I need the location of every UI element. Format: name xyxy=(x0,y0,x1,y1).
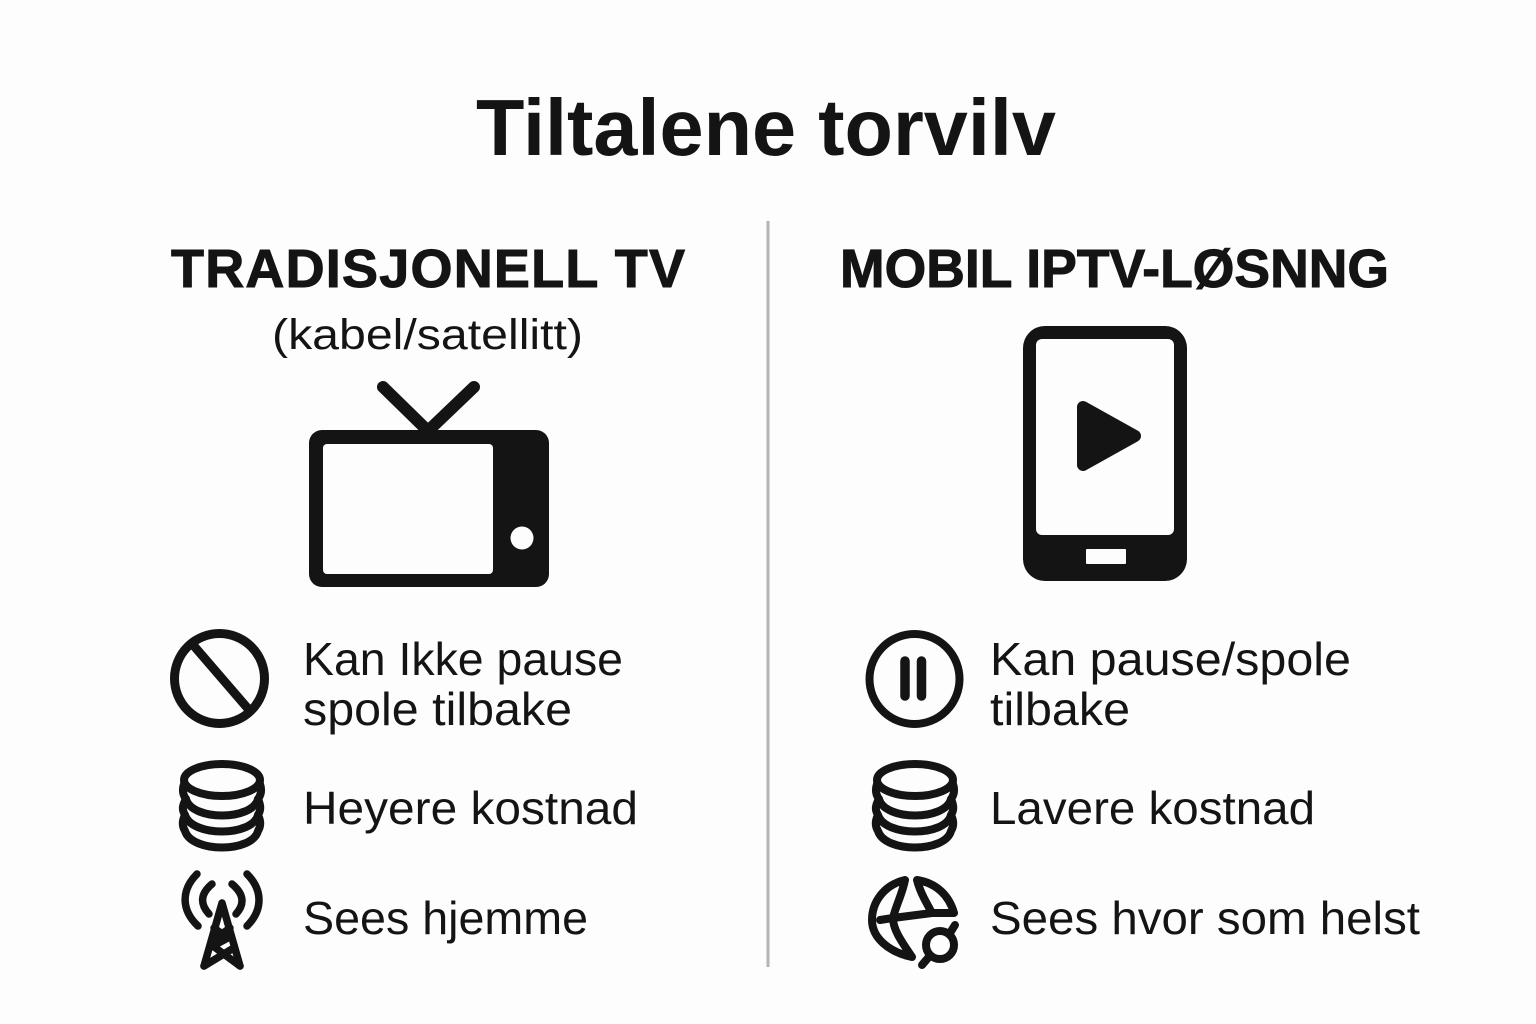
icon: television xyxy=(309,387,549,587)
icon: globe with magnifier xyxy=(872,880,955,965)
text: rewind: spole tilbake xyxy=(303,683,572,735)
panel: mobile IPTV xyxy=(840,239,1420,965)
icon: coins xyxy=(183,764,261,848)
text: watch anywhere: Sees hvor som helst xyxy=(990,892,1420,944)
icon: smartphone xyxy=(1023,326,1187,581)
text: can pause: Kan pause/spole xyxy=(990,633,1351,685)
center divider xyxy=(766,221,770,967)
subheading: cable/satellite: (kabel/satellitt) xyxy=(272,311,583,359)
icon: antenna xyxy=(185,874,259,966)
panel: traditional TV xyxy=(171,239,685,966)
title: Tiltalene torvilv xyxy=(476,83,1057,172)
text: watch at home: Sees hjemme xyxy=(303,892,588,944)
text: higher cost: Heyere kostnad xyxy=(303,782,638,834)
text: cannot pause: Kan Ikke pause xyxy=(303,633,623,685)
icon: coins xyxy=(876,764,954,848)
icon: prohibited xyxy=(174,634,264,724)
text: lower cost: Lavere kostnad xyxy=(990,782,1315,834)
text: rewind: tilbake xyxy=(990,683,1130,735)
heading: traditional TV: TRADISJONELL TV xyxy=(171,239,685,299)
icon: pause xyxy=(870,634,960,724)
heading: mobile IPTV: MOBIL IPTV-LØSNNG xyxy=(840,239,1389,299)
